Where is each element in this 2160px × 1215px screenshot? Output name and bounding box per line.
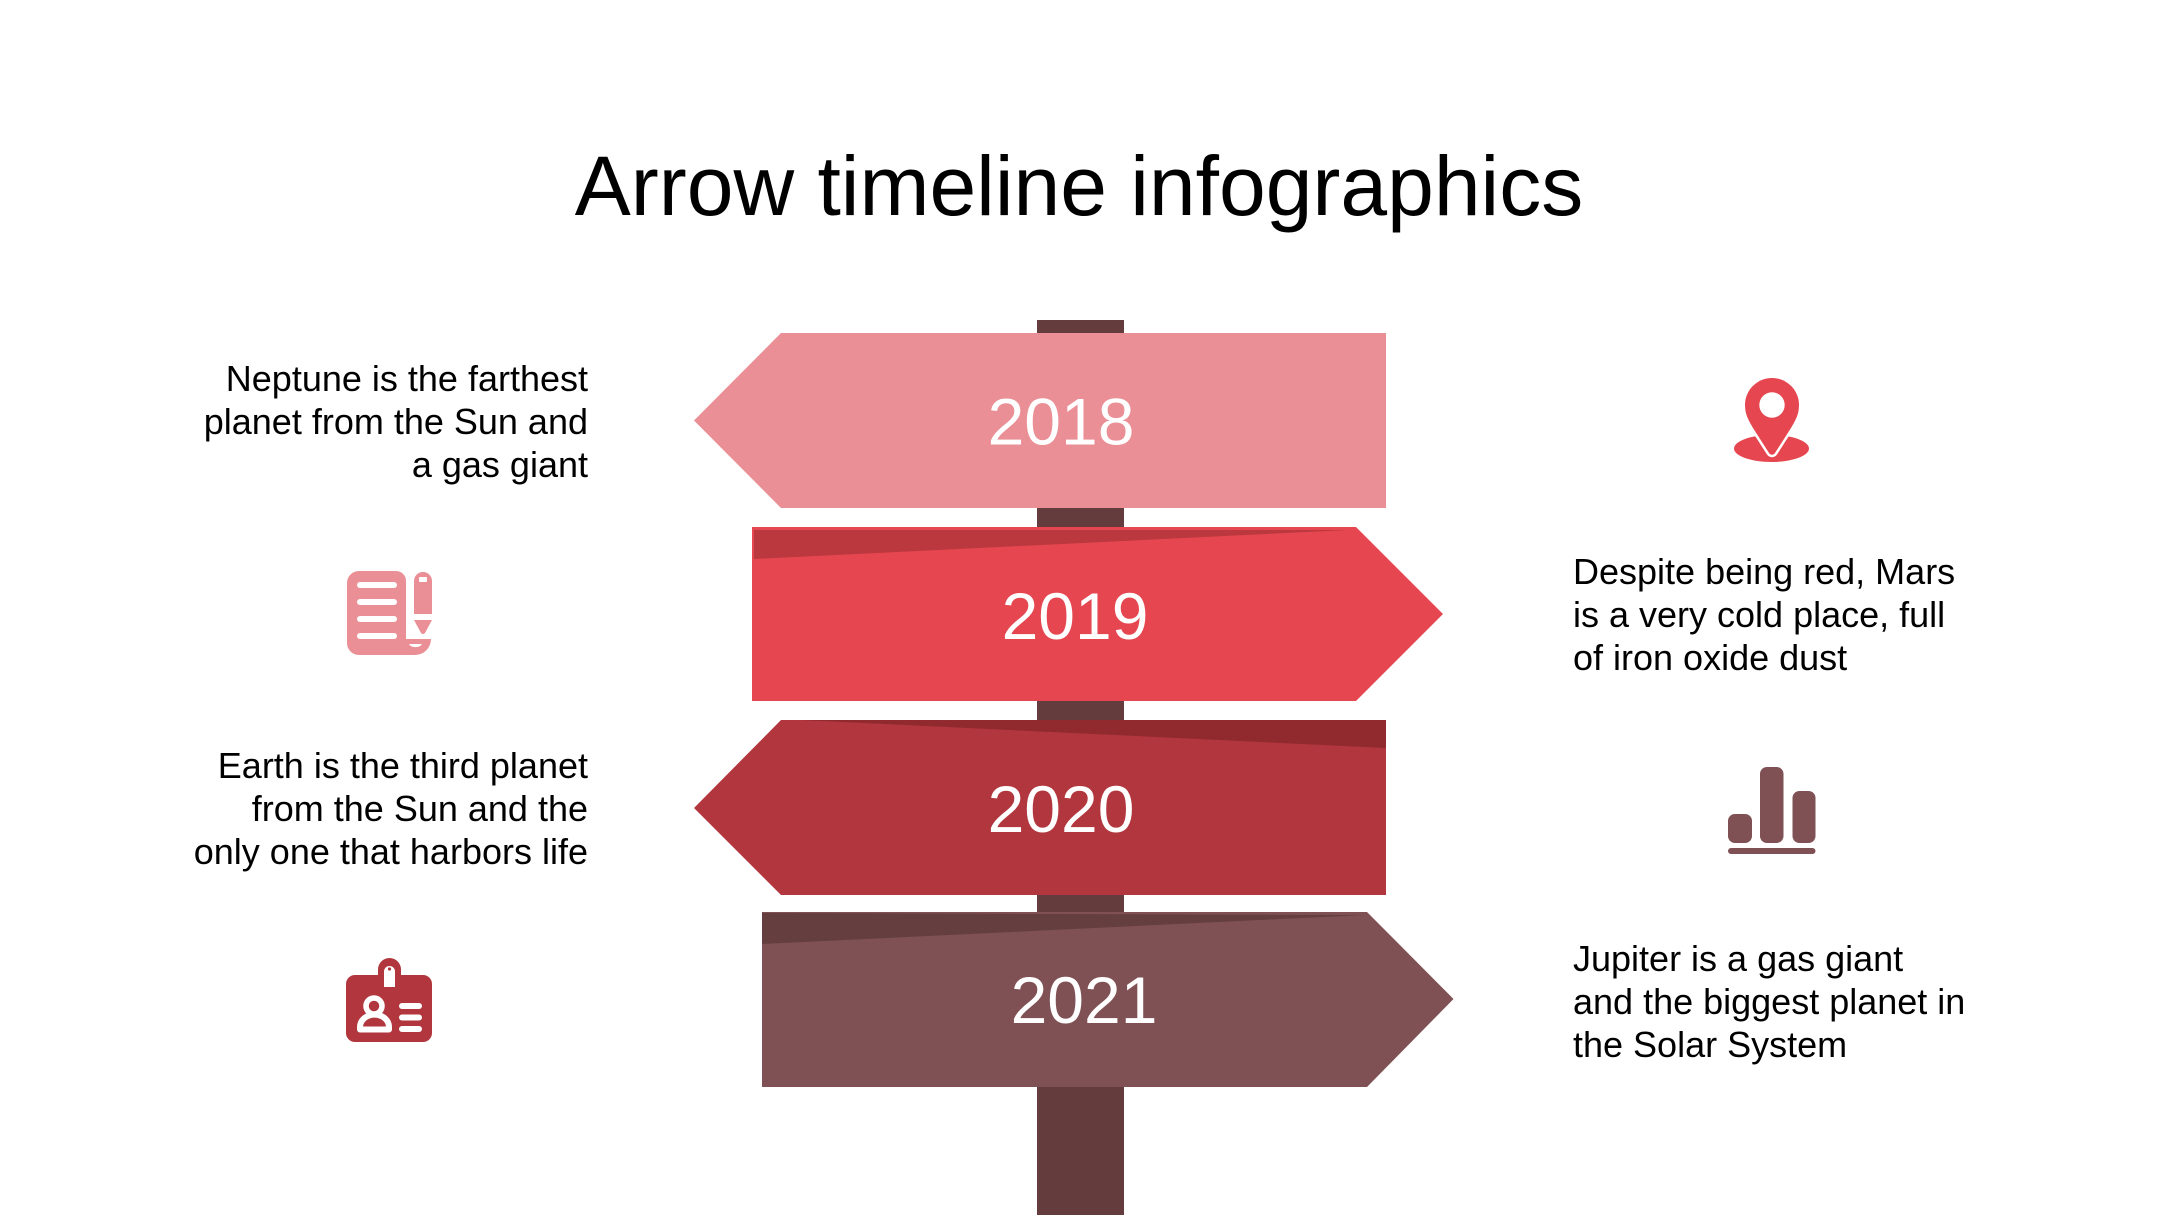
text: Neptune: Neptune is the farthest [226,358,588,399]
icon: bar chart [1728,767,1816,854]
post [1037,320,1124,1215]
arrow: 2019 [752,527,1443,701]
arrow: 2018 [694,333,1386,508]
text: Mars: of iron oxide dust [1573,637,1847,678]
text: Jupiter: Jupiter is a gas giant [1573,938,1903,979]
text: Neptune: planet from the Sun and [204,401,588,442]
icon: id badge [346,958,432,1042]
arrow: 2019: 2019 [1002,579,1148,653]
text: Mars: Despite being red, Mars [1573,551,1955,592]
title: Arrow timeline infographics [575,139,1583,233]
text: Earth: from the Sun and the [252,788,588,829]
text: Mars: is a very cold place, full [1573,594,1945,635]
text: Jupiter: and the biggest planet in [1573,981,1965,1022]
arrow: 2020: 2020 [988,772,1134,846]
text: Mars [1573,551,1955,678]
arrow: 2021 [762,912,1454,1087]
arrow: 2018: 2018 [988,384,1134,458]
text: Neptune: a gas giant [412,444,588,485]
signpost: post and four arrows [694,320,1454,1215]
arrow: 2021: 2021 [1011,963,1157,1037]
icon: location pin [1734,378,1809,462]
text: Earth [194,745,588,872]
text: Earth: Earth is the third planet [218,745,588,786]
icon: notes and pencil [347,571,432,655]
arrow: 2020 [694,720,1386,895]
text: Jupiter: the Solar System [1573,1024,1847,1065]
text: Earth: only one that harbors life [194,831,588,872]
text: Jupiter [1573,938,1965,1065]
text: Neptune [204,358,588,485]
